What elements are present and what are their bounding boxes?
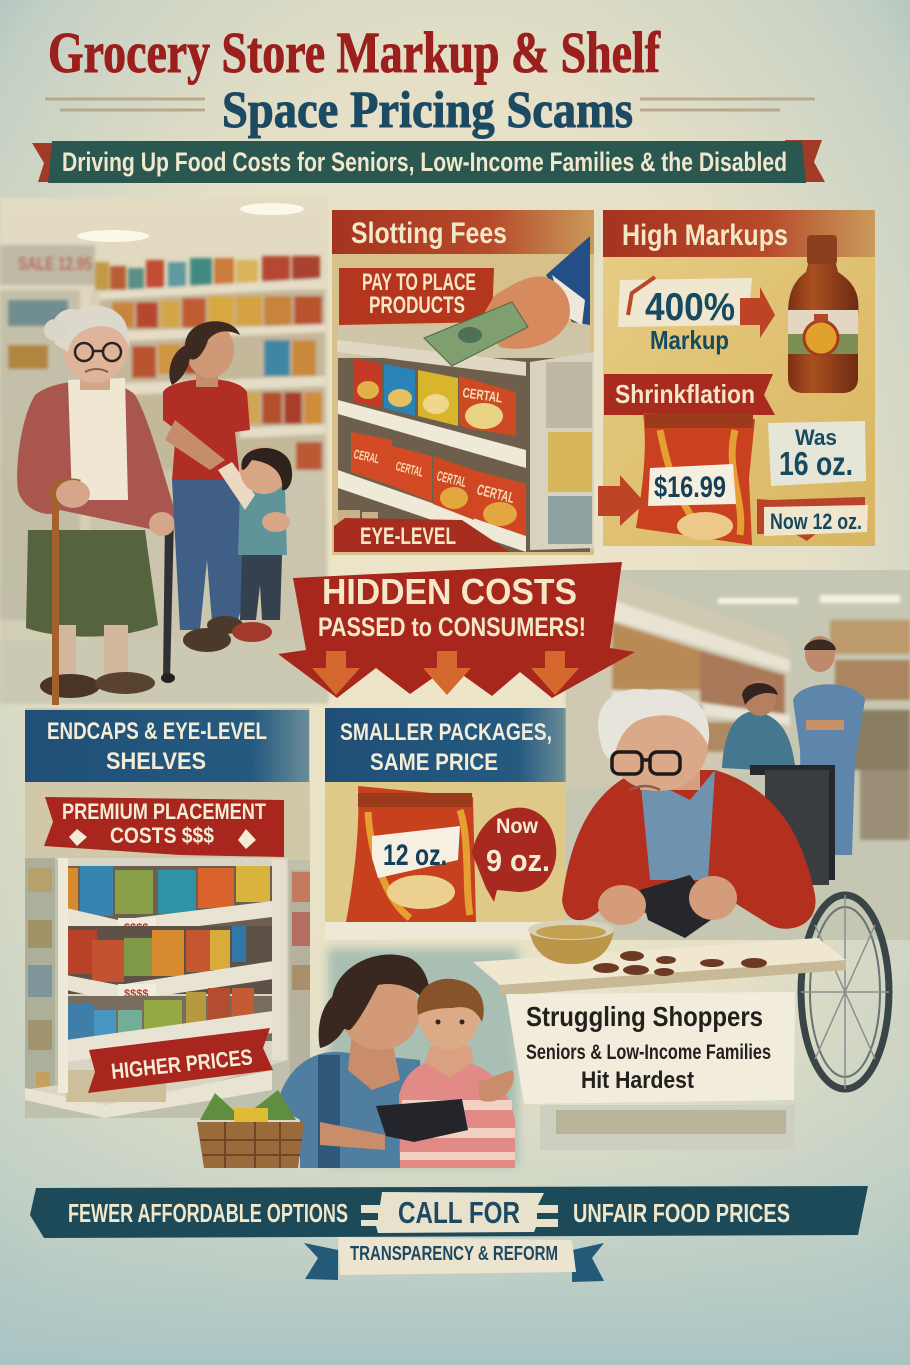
callout: now 9 oz: 9 oz. (486, 843, 550, 878)
400% markup callout (618, 277, 775, 355)
scene: man in wheelchair counting coins (562, 570, 910, 1089)
figure: mother (277, 955, 429, 1168)
callout: struggling shoppers: Struggling Shoppers (526, 1001, 763, 1032)
banner: hidden costs passed to consumers: PASSED to CONSUMERS! (318, 612, 586, 642)
ribbon: call for: CALL FOR (398, 1195, 520, 1230)
cereal boxes, lower shelf: CERAL (352, 446, 381, 466)
figure: grandmother with cane (17, 306, 178, 705)
figure: elderly man (562, 689, 816, 938)
endcap shelf unit: $$$$ (124, 922, 148, 934)
scene: store aisle with grandmother, mother and child (0, 198, 328, 705)
figure: mother (163, 321, 250, 652)
figure: child (218, 446, 292, 642)
panel: high markups (598, 210, 875, 546)
callout: now 12 oz (757, 497, 868, 541)
callout: now 12 oz: Now 12 oz. (770, 509, 862, 534)
banner: hidden costs passed to consumers (278, 562, 635, 698)
figure: child (399, 979, 515, 1168)
heading: slotting fees: Slotting Fees (351, 217, 507, 250)
heading: endcaps: SHELVES (106, 748, 206, 775)
callout: pay to place products: PAY TO PLACE (362, 269, 476, 296)
icon: snack bag 12 oz (346, 786, 476, 922)
callout: struggling shoppers (506, 992, 795, 1104)
heading: smaller packages: SAME PRICE (370, 749, 498, 776)
callout: pay to place products (339, 268, 494, 325)
icon: bowl (528, 920, 614, 964)
400% markup callout: Markup (650, 325, 729, 355)
callout: eye-level (334, 518, 510, 552)
cereal boxes, lower shelf: CERTAL (435, 467, 468, 490)
ribbon: transparency and reform (304, 1237, 604, 1282)
scene: mother and child checking prices (197, 948, 518, 1168)
title: Grocery Store Markup & Shelf (48, 20, 661, 85)
callout: premium placement costs (44, 797, 284, 857)
callout: now 9 oz (472, 808, 556, 902)
icon: medicine bottle (788, 235, 858, 393)
callout: higher prices (88, 1028, 273, 1093)
banner: hidden costs passed to consumers: HIDDEN COSTS (322, 571, 577, 612)
background shoppers (722, 636, 865, 855)
callout: eye-level: EYE-LEVEL (360, 523, 456, 550)
heading: smaller packages: SMALLER PACKAGES, (340, 719, 552, 746)
footer banner: call for transparency and reform: UNFAIR FOOD PRICES (573, 1198, 790, 1228)
icon: snack bag with price (598, 413, 755, 545)
heading: endcaps: ENDCAPS & EYE-LEVEL (47, 718, 267, 745)
shelf unit (337, 326, 594, 552)
ribbon: call for (361, 1192, 558, 1233)
cereal boxes, lower shelf (351, 432, 526, 536)
subtitle banner (32, 140, 825, 183)
title (45, 20, 815, 139)
callout: shrinkflation (604, 374, 775, 415)
ribbon: transparency and reform: TRANSPARENCY & REFORM (350, 1243, 558, 1265)
400% markup callout: 400% (645, 286, 735, 329)
heading: smaller packages (325, 708, 566, 782)
callout: shrinkflation: Shrinkflation (615, 379, 755, 409)
callout: now 9 oz: Now (496, 815, 539, 838)
callout: pay to place products: PRODUCTS (369, 292, 465, 319)
footer banner: call for transparency and reform (30, 1186, 868, 1282)
panel: endcaps and eye-level shelves (22, 708, 310, 1118)
store shelves: SALE 12.95 (18, 254, 92, 274)
heading: endcaps (25, 710, 309, 782)
callout: struggling shoppers: Seniors & Low-Income Families (526, 1041, 771, 1064)
callout: higher prices: HIGHER PRICES (110, 1044, 254, 1084)
cereal boxes, top shelf: CERTAL (462, 384, 504, 406)
heading: high markups (603, 210, 875, 257)
cereal boxes, top shelf (353, 358, 516, 436)
arrows down (312, 651, 579, 695)
endcap shelf unit (22, 858, 288, 1118)
scene: counter with coins (473, 920, 846, 1150)
cereal boxes, lower shelf: CERTAL (475, 481, 516, 507)
icon: snack bag 12 oz: 12 oz. (383, 839, 447, 872)
wheelchair (750, 770, 889, 1089)
icon: tablet (376, 1099, 468, 1142)
side shelves (25, 858, 310, 1100)
panel: smaller packages, same price (325, 708, 566, 940)
heading: high markups: High Markups (622, 219, 788, 252)
callout: was 16 oz: 16 oz. (779, 445, 853, 482)
cereal boxes, lower shelf: CERTAL (394, 458, 425, 480)
callout: premium placement costs: COSTS $$$ (110, 823, 214, 848)
panel: slotting fees (332, 210, 594, 555)
endcap shelf unit: $$$$ (124, 988, 148, 1000)
icon: snack bag with price: $16.99 (654, 471, 726, 504)
icon: hand paying with money (424, 236, 590, 366)
store shelves (0, 245, 328, 703)
callout: was 16 oz: Was (795, 425, 837, 450)
title: Space Pricing Scams (222, 82, 633, 139)
icon: coins (593, 951, 767, 976)
callout: premium placement costs: PREMIUM PLACEMENT (62, 799, 266, 824)
callout: struggling shoppers: Hit Hardest (581, 1067, 694, 1094)
icon: grocery basket (197, 1090, 304, 1168)
callout: was 16 oz (768, 421, 866, 486)
footer banner: call for transparency and reform: FEWER AFFORDABLE OPTIONS (68, 1198, 348, 1228)
heading: slotting fees (332, 210, 594, 254)
